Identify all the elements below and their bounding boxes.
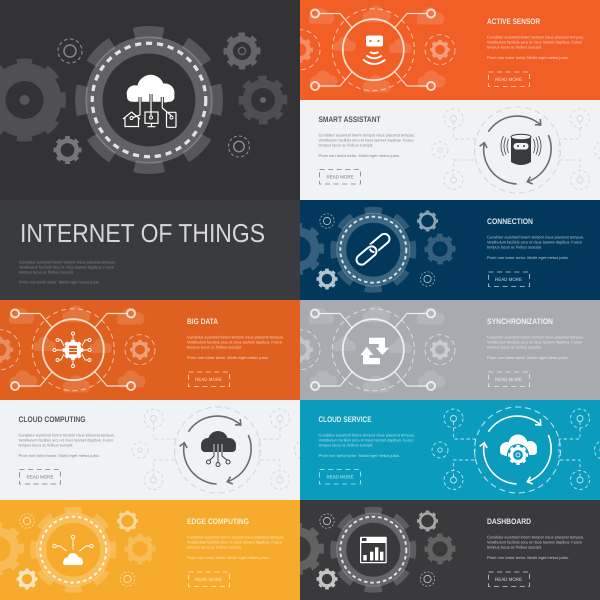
text block: Proin non tortor tortor. Morbi eget metus justo. (487, 555, 569, 560)
heading: Internet of Things: INTERNET OF THINGS (20, 218, 265, 248)
text block: Proin non tortor tortor. Morbi eget metus justo. (487, 255, 569, 260)
text block: Proin non tortor tortor. Morbi eget metus justo. (318, 453, 400, 458)
icon: sensor with signal waves (363, 36, 386, 64)
text block: Curabitur euismod lorem tempor risus placerat tempus, (487, 234, 584, 240)
text block (318, 132, 415, 158)
icon: sync arrows (360, 338, 389, 364)
heading: CONNECTION (487, 217, 533, 226)
button: read more: READ MORE (326, 174, 354, 180)
text block (487, 34, 584, 60)
button: read more: READ MORE (495, 277, 522, 283)
panel: connection (300, 200, 600, 300)
text block (187, 534, 284, 560)
panel: edge computing (0, 500, 300, 600)
icon: cloud with circuit nodes (201, 431, 236, 466)
button: read more (488, 372, 530, 386)
text block: Proin non tortor tortor. Morbi eget metus justo. (18, 453, 100, 458)
text block: Vestibulum facilisis arcu et risus laoreet dapibus. Fusce (187, 340, 282, 344)
heading: BIG DATA (187, 317, 218, 326)
button: read more: READ MORE (495, 377, 522, 383)
heading: SYNCHRONIZATION (487, 317, 553, 326)
panel: title (0, 200, 300, 300)
button: read more: READ MORE (495, 77, 522, 83)
button: read more (320, 170, 360, 184)
text block: Vestibulum facilisis arcu et risus laoreet dapibus. Fusce (487, 40, 582, 44)
text block: tempus lacus ac finibus suscipit. (487, 44, 542, 50)
text block (487, 334, 584, 360)
text block: title intro: tempus lacus ac finibus suscipit. (19, 270, 74, 274)
text block (187, 334, 284, 360)
button: read more (188, 572, 230, 586)
text block: Vestibulum facilisis arcu et risus laoreet dapibus. Fusce (487, 540, 582, 544)
button: read more (20, 470, 60, 484)
text block: title intro (19, 260, 116, 284)
text block: Curabitur euismod lorem tempor risus placerat tempus, (487, 334, 584, 340)
panel: cloud service (300, 400, 600, 500)
text block: tempus lacus ac finibus suscipit. (187, 344, 242, 350)
button: read more: READ MORE (495, 577, 522, 583)
text block: title intro: Proin non tortor tortor. Morbi eget metus justo. (19, 280, 100, 284)
button: read more (488, 72, 530, 86)
text block: tempus lacus ac finibus suscipit. (318, 142, 374, 148)
text block: Vestibulum facilisis arcu et risus laoreet dapibus. Fusce (318, 438, 414, 442)
button: read more (488, 572, 530, 586)
text block (487, 234, 584, 260)
button: read more (188, 372, 230, 386)
button: read more (488, 272, 530, 286)
heading: DASHBOARD (487, 517, 531, 526)
text block: Vestibulum facilisis arcu et risus laoreet dapibus. Fusce (187, 540, 282, 544)
text block (487, 534, 584, 560)
text block: tempus lacus ac finibus suscipit. (487, 544, 542, 550)
text block: title intro: Curabitur euismod lorem tempor risus placerat tempus, (19, 260, 116, 264)
text block: Curabitur euismod lorem tempor risus placerat tempus, (187, 534, 284, 540)
panel: big data (0, 300, 300, 400)
text block: Vestibulum facilisis arcu et risus laoreet dapibus. Fusce (318, 138, 414, 142)
text block: Proin non tortor tortor. Morbi eget metus justo. (187, 355, 269, 360)
heading: ACTIVE SENSOR (487, 17, 540, 26)
text block: Proin non tortor tortor. Morbi eget metus justo. (487, 55, 569, 60)
text block: tempus lacus ac finibus suscipit. (187, 544, 242, 550)
text block: Proin non tortor tortor. Morbi eget metus justo. (187, 555, 269, 560)
icon: cloud connected to devices (123, 75, 176, 127)
icon: main gear ring (81, 32, 217, 168)
button: read more: READ MORE (26, 474, 54, 480)
icon: gears around the centre (0, 34, 285, 163)
icon: cloud with gear (500, 434, 537, 466)
heading: SMART ASSISTANT (318, 115, 381, 124)
heading: CLOUD SERVICE (318, 415, 372, 424)
text block: Curabitur euismod lorem tempor risus placerat tempus, (487, 534, 584, 540)
text block: Curabitur euismod lorem tempor risus placerat tempus, (187, 334, 284, 340)
text block: tempus lacus ac finibus suscipit. (487, 344, 542, 350)
text block: Vestibulum facilisis arcu et risus laoreet dapibus. Fusce (18, 438, 114, 442)
icon: smart speaker (501, 134, 541, 165)
panel: active sensor (300, 0, 600, 100)
text block (18, 432, 115, 458)
panel: hero gears (0, 26, 288, 174)
text block: Vestibulum facilisis arcu et risus laoreet dapibus. Fusce (487, 340, 582, 344)
icon: big data chip (53, 332, 91, 368)
heading: CLOUD COMPUTING (18, 415, 86, 424)
text block: title intro: Vestibulum facilisis arcu et risus laoreet dapibus. Fusce (19, 264, 114, 270)
text block: Curabitur euismod lorem tempor risus placerat tempus, (318, 132, 415, 138)
text block (318, 432, 415, 458)
button: read more: READ MORE (195, 377, 222, 383)
button: read more: READ MORE (195, 577, 222, 583)
text block: Curabitur euismod lorem tempor risus placerat tempus, (318, 432, 415, 438)
text block: Curabitur euismod lorem tempor risus placerat tempus, (18, 432, 115, 438)
text block: tempus lacus ac finibus suscipit. (487, 244, 542, 250)
text block: Proin non tortor tortor. Morbi eget metus justo. (487, 355, 569, 360)
text block: Proin non tortor tortor. Morbi eget metus justo. (318, 153, 400, 158)
button: read more: READ MORE (326, 474, 354, 480)
text block: tempus lacus ac finibus suscipit. (318, 442, 374, 448)
panel: dashboard (300, 506, 584, 593)
text block: Curabitur euismod lorem tempor risus placerat tempus, (487, 34, 584, 40)
text block: tempus lacus ac finibus suscipit. (18, 442, 74, 448)
panel: synchronization (300, 300, 600, 400)
button: read more (320, 470, 360, 484)
heading: EDGE COMPUTING (187, 517, 249, 526)
icon: chain link (354, 232, 392, 267)
icon: cloud with edge nodes (53, 535, 93, 565)
icon: dashboard window (360, 537, 387, 563)
panel: cloud computing (0, 400, 300, 500)
text block: Vestibulum facilisis arcu et risus laoreet dapibus. Fusce (487, 240, 582, 244)
panel: smart assistant (300, 100, 600, 200)
